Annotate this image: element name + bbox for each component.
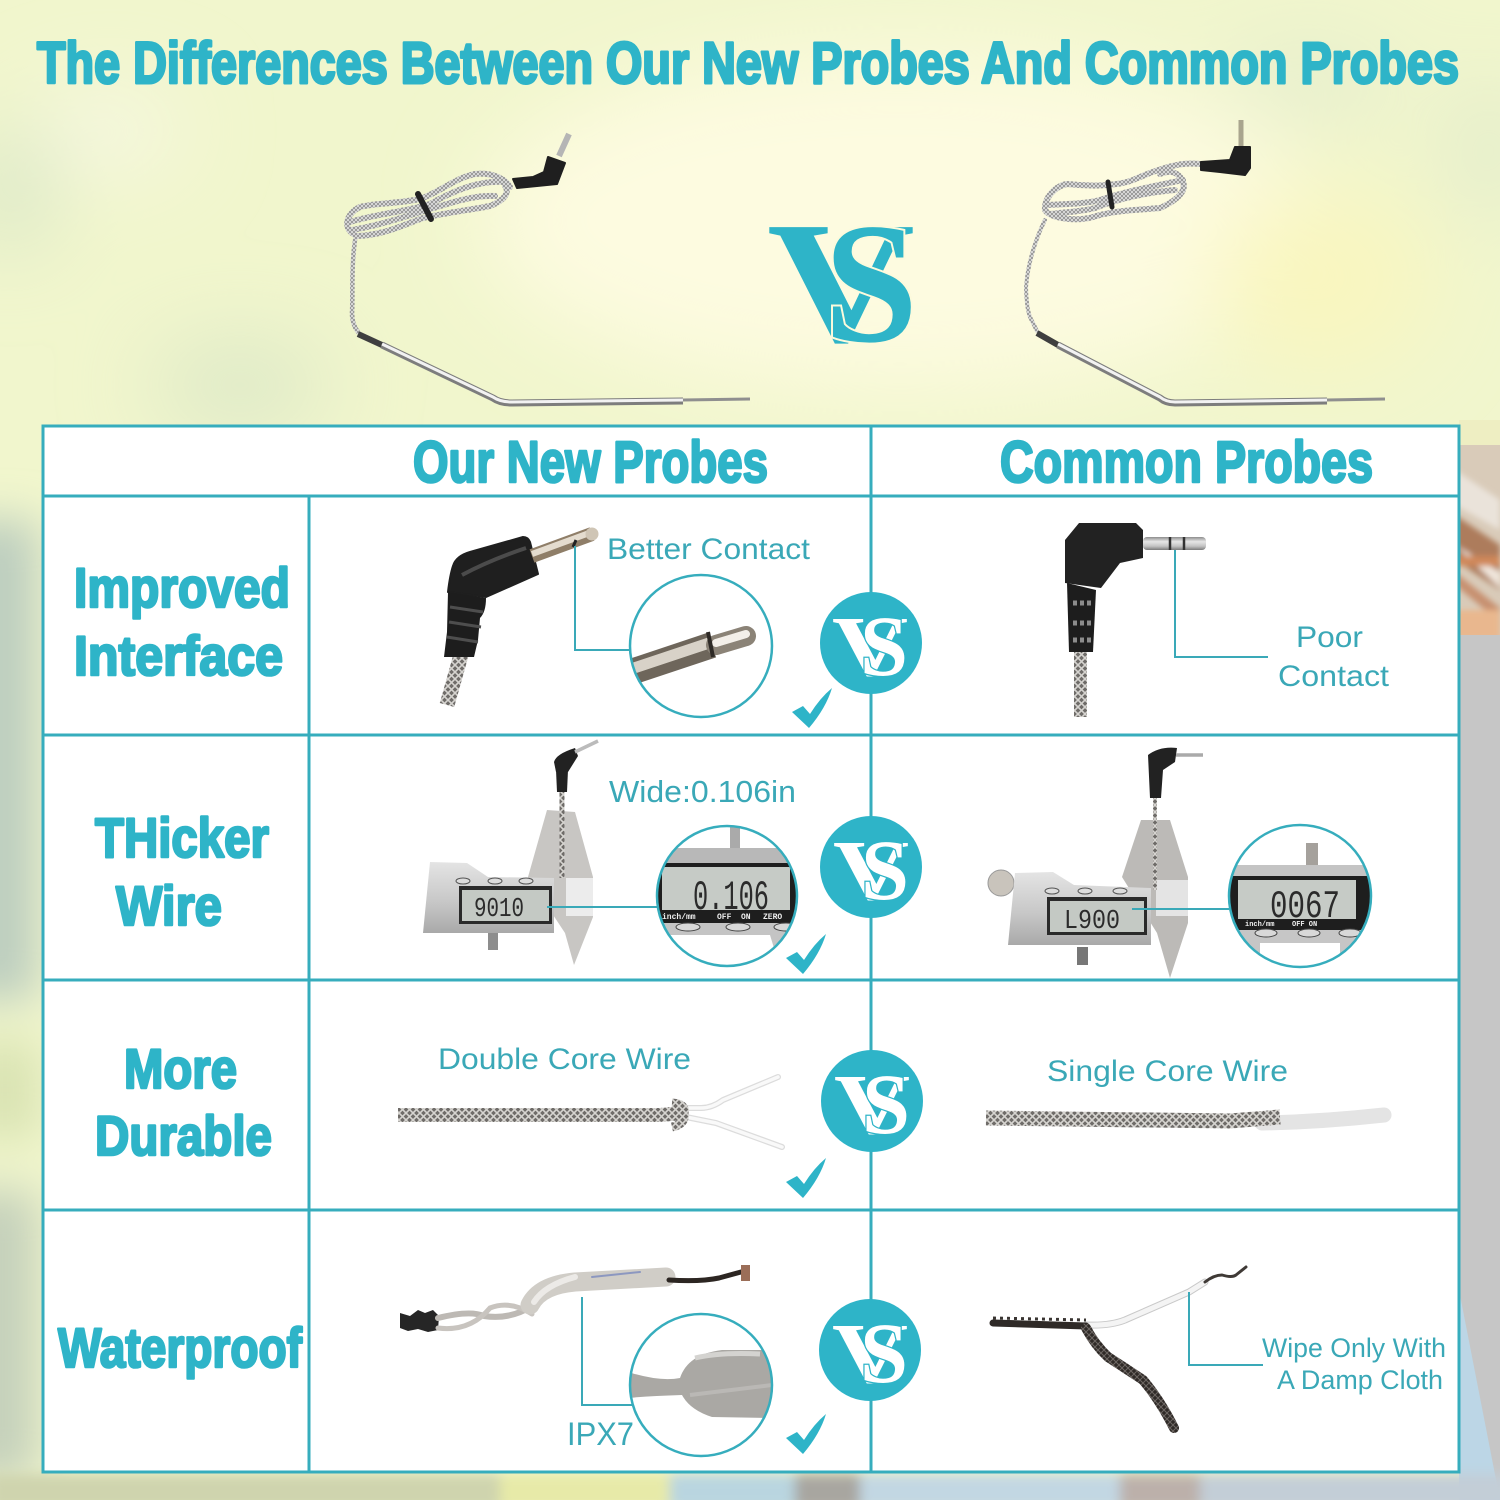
row 2 right: magnifier of caliper reading: 0067 xyxy=(1270,885,1340,929)
probe photo: common probe xyxy=(1026,120,1385,403)
row 2 left: magnifier of caliper reading: ZERO xyxy=(763,913,782,922)
row 3 right: single core wire label: Single Core Wire xyxy=(1047,1055,1288,1088)
row 3 centre: vs badge xyxy=(821,1050,923,1152)
row 4 right: wipe only label: A Damp Cloth xyxy=(1277,1365,1443,1395)
row 3 centre: vs badge: V xyxy=(834,1056,910,1152)
probe photo: our new probe xyxy=(347,134,750,403)
column heading: our new probes: Our New Probes xyxy=(413,430,768,495)
coiled braided cable xyxy=(347,174,510,332)
row 3: check mark xyxy=(786,1158,826,1198)
row 2 right: magnifier of caliper reading: OFF ON xyxy=(1292,921,1317,929)
row 3 right: single core wire photo xyxy=(986,1115,1384,1123)
row 2 left: magnifier of caliper reading: inch/mm xyxy=(662,913,696,922)
row 2 left: caliper photo xyxy=(423,741,598,965)
row 1 right: callout line xyxy=(1175,550,1268,657)
row 1 left: callout line xyxy=(575,546,632,650)
connector xyxy=(513,157,565,188)
row 2 centre: vs badge: V xyxy=(833,822,909,918)
row 1 centre: vs badge xyxy=(820,592,922,694)
metal spike xyxy=(358,334,750,403)
row 2 right: magnifier of caliper reading xyxy=(1225,825,1375,970)
row 4 centre: vs badge: V xyxy=(832,1305,908,1401)
row 2 left: magnifier of caliper reading xyxy=(656,824,798,968)
row 2 left: wide measurement label: Wide:0.106in xyxy=(609,774,796,809)
row label: more durable: More xyxy=(124,1037,237,1100)
row 4 right: stripped wire photo xyxy=(993,1267,1246,1428)
row 2 left: magnifier of caliper reading: ON xyxy=(741,913,751,922)
column heading: common probes: Common Probes xyxy=(1000,430,1373,495)
row 2 right: callout line xyxy=(1132,908,1229,910)
right strip tones xyxy=(1459,420,1500,1480)
row 1 right: poor contact label: Contact xyxy=(1278,660,1390,693)
row label: thicker wire: Wire xyxy=(116,874,222,937)
row 3 left: double core wire label: Double Core Wire xyxy=(438,1043,691,1076)
row 3 left: double core wire photo xyxy=(398,1077,782,1147)
row 2 left: caliper photo: 9010 xyxy=(474,895,524,925)
row 4 centre: vs badge: S xyxy=(860,1305,908,1401)
row label: more durable xyxy=(95,1037,272,1167)
row 1 right: right-angle connector photo xyxy=(1065,523,1206,717)
comparison table xyxy=(43,426,1459,1472)
row label: thicker wire xyxy=(95,806,269,937)
row 2 left: magnifier of caliper reading: 0.106 xyxy=(693,874,769,922)
row 1: check mark xyxy=(792,688,832,728)
row 4 right: wipe only label: Wipe Only With xyxy=(1262,1333,1446,1363)
row 3 centre: vs badge: S xyxy=(862,1056,910,1152)
VS emblem: S xyxy=(824,189,918,379)
row 1 centre: vs badge: V xyxy=(832,598,908,694)
metal spike xyxy=(1037,333,1385,403)
row label: improved interface: Improved xyxy=(74,556,290,619)
row label: improved interface xyxy=(74,556,290,687)
row 1 centre: vs badge: S xyxy=(860,598,908,694)
row 4 left: ipx7 label: IPX7 xyxy=(567,1416,634,1452)
left strip tones xyxy=(0,520,40,1480)
row 2 centre: vs badge: S xyxy=(861,822,909,918)
row label: waterproof: Waterproof xyxy=(58,1316,302,1379)
row 4 centre: vs badge xyxy=(819,1299,921,1401)
row 1 right: poor contact label xyxy=(1278,621,1390,693)
row 1 left: angled connector photo xyxy=(444,528,598,705)
row 2 left: callout line xyxy=(547,906,657,908)
row label: improved interface: Interface xyxy=(74,624,283,687)
row 4 left: magnifier of seal xyxy=(628,1314,772,1456)
row label: thicker wire: THicker xyxy=(95,806,269,869)
row 4 left: sealed wire photo xyxy=(400,1265,750,1332)
row 2: check mark xyxy=(786,934,826,974)
row 2 right: caliper photo: L900 xyxy=(1064,907,1120,937)
coiled braided cable xyxy=(1026,163,1200,331)
row 2 left: magnifier of caliper reading: OFF xyxy=(717,913,732,922)
row 2 right: magnifier of caliper reading: inch/mm xyxy=(1245,921,1274,929)
connector xyxy=(1201,147,1250,175)
row 1 right: poor contact label: Poor xyxy=(1296,621,1363,654)
row 4 left: callout line xyxy=(582,1297,632,1405)
bottom strip tones xyxy=(0,1474,1500,1500)
row 4: check mark xyxy=(786,1414,826,1454)
row 2 right: caliper photo xyxy=(988,748,1203,978)
row 1 left: magnifier of plug xyxy=(625,575,772,717)
row 2 centre: vs badge xyxy=(820,816,922,918)
row 1 left: better contact label: Better Contact xyxy=(607,533,811,566)
row 4 right: wipe only label xyxy=(1262,1333,1446,1395)
row 4 right: callout line xyxy=(1189,1292,1263,1365)
row label: more durable: Durable xyxy=(95,1104,272,1167)
VS emblem: V xyxy=(767,186,915,379)
